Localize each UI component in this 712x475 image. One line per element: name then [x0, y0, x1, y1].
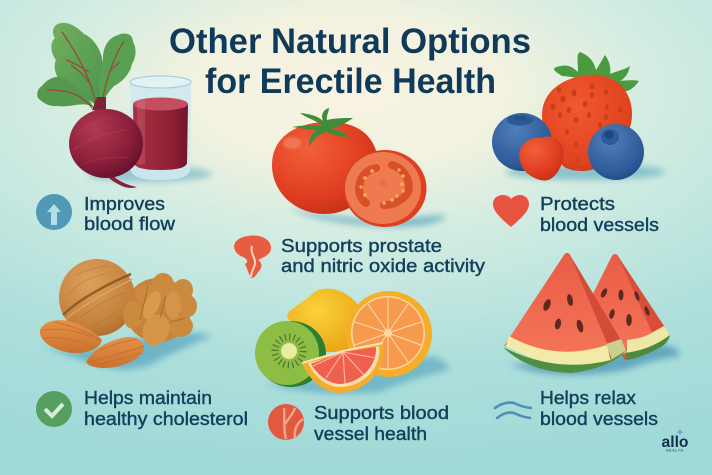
text: Protects	[540, 193, 615, 214]
text	[281, 235, 486, 276]
text: Helps relax	[540, 387, 637, 408]
icon: left blueberry	[492, 113, 552, 171]
text: Supports blood	[314, 402, 449, 423]
icon: grapefruit wedge	[302, 343, 384, 393]
text: Supports prostate	[281, 235, 442, 256]
panel: citrus fruits	[255, 289, 450, 394]
text: Improves	[84, 193, 165, 214]
text: vessel health	[314, 423, 427, 444]
strawberry seeds	[550, 83, 622, 162]
logo: allo health	[662, 428, 689, 452]
text: and nitric oxide activity	[281, 255, 486, 276]
text	[314, 402, 449, 444]
icon: kiwi	[255, 321, 326, 387]
icon: prostate	[234, 236, 271, 278]
icon: left almond	[40, 320, 102, 353]
title: Other Natural Options	[169, 22, 531, 61]
text: blood flow	[84, 213, 176, 234]
text: healthy cholesterol	[84, 408, 248, 429]
shadow: beet	[88, 166, 212, 182]
icon: small heart-shaped berry	[519, 136, 563, 181]
label: helps relax blood vessels	[495, 387, 658, 429]
panel: beet and juice	[37, 23, 212, 188]
panel: watermelon	[503, 253, 680, 375]
text: blood vessels	[540, 214, 659, 235]
orange segment lines	[355, 298, 421, 368]
icon: back watermelon slice	[590, 254, 670, 360]
back slice seeds	[598, 287, 651, 329]
panel: strawberry and blueberries	[492, 52, 665, 181]
label: helps maintain healthy cholesterol	[36, 387, 248, 429]
tomato seeds	[359, 168, 405, 205]
icon: up arrow	[36, 194, 72, 230]
icon: check mark	[36, 391, 72, 427]
label: supports blood vessel health	[268, 402, 449, 444]
icon: tomato half	[344, 150, 426, 227]
text	[540, 193, 659, 235]
panel: tomato	[272, 108, 446, 227]
icon: waves	[495, 403, 531, 418]
icon: beetroot	[69, 109, 143, 188]
shadow: watermelon	[510, 345, 680, 375]
text	[84, 193, 176, 234]
icon: beet juice glass	[130, 76, 191, 180]
icon: lemon	[287, 289, 362, 352]
title: for Erectile Health	[205, 62, 496, 101]
text: Helps maintain	[84, 387, 212, 408]
label: protects blood vessels	[493, 193, 659, 235]
shadow: berries	[505, 164, 665, 180]
icon: front watermelon slice	[503, 253, 627, 373]
shadow: tomato	[288, 208, 446, 227]
logo: allo health: allo	[662, 434, 689, 451]
logo: allo health: HEALTH	[666, 448, 683, 452]
title	[169, 22, 531, 101]
icon: strawberry leaves	[554, 52, 639, 91]
shadow: nuts	[42, 333, 212, 370]
icon: right almond	[86, 337, 144, 368]
front slice seeds	[542, 294, 585, 333]
label: improves blood flow	[36, 193, 176, 234]
shadow: citrus	[266, 356, 450, 394]
icon: strawberry	[542, 75, 632, 171]
icon: walnut kernel	[123, 273, 197, 350]
icon: beet leaves	[37, 23, 136, 112]
label: supports prostate and nitric oxide activity	[234, 235, 486, 278]
text: blood vessels	[540, 408, 658, 429]
icon: heart	[493, 195, 529, 227]
panel: walnuts and almonds	[40, 259, 212, 370]
icon: right blueberry	[588, 124, 644, 180]
icon: whole walnut	[59, 259, 135, 336]
text	[540, 387, 658, 429]
icon: orange slice	[346, 291, 432, 377]
icon: whole tomato	[272, 108, 378, 214]
text	[84, 387, 248, 429]
icon: blood vessel	[268, 404, 304, 440]
